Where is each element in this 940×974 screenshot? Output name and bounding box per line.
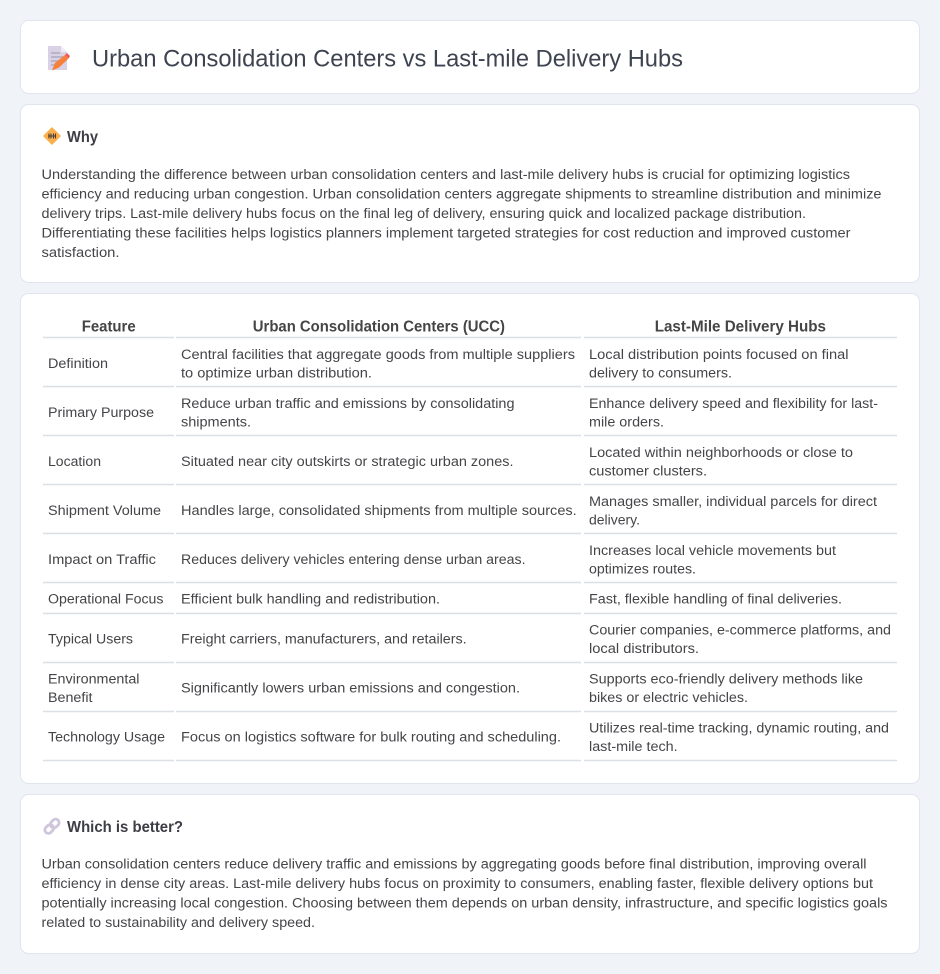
row: operational focus: Fast, flexible handling of final deliveries.: [589, 592, 842, 608]
row: primary purpose: Enhance delivery speed and flexibility for last-: [589, 396, 878, 412]
text block: why paragraph: Differentiating these facilities helps logistics planners implement targeted strategies for cost reduction and improved customer: [42, 226, 851, 242]
row: technology usage: [48, 720, 889, 755]
table header: Feature: [82, 318, 136, 336]
row: definition: Central facilities that aggregate goods from multiple suppliers: [181, 347, 575, 363]
row: typical users: Courier companies, e-commerce platforms, and: [589, 622, 891, 638]
row: shipment volume: Shipment Volume: [48, 503, 161, 519]
row: impact on traffic: [48, 543, 836, 578]
text block: why paragraph: [42, 167, 882, 261]
row: environmental benefit: Significantly lowers urban emissions and congestion.: [181, 680, 520, 696]
text block: which is better paragraph: [42, 856, 887, 931]
row: operational focus: [48, 592, 842, 608]
row: impact on traffic: Impact on Traffic: [48, 552, 156, 568]
table header: Last-Mile Delivery Hubs: [655, 318, 826, 336]
heading: why: Why: [67, 129, 98, 146]
row: operational focus: Efficient bulk handling and redistribution.: [181, 592, 440, 608]
row: shipment volume: [48, 494, 877, 528]
icon: document with pencil: [48, 46, 70, 70]
heading: which is better: Which is better?: [67, 819, 183, 836]
row: location: Situated near city outskirts or strategic urban zones.: [181, 454, 514, 470]
row: typical users: Typical Users: [48, 632, 133, 648]
row: primary purpose: Reduce urban traffic and emissions by consolidating: [181, 396, 514, 412]
icon: diamond sign: [44, 128, 60, 144]
row: typical users: Freight carriers, manufacturers, and retailers.: [181, 632, 467, 648]
text block: why paragraph: satisfaction.: [42, 245, 119, 261]
row: definition: Local distribution points focused on final: [589, 347, 848, 363]
title: Urban Consolidation Centers vs Last-mile Delivery Hubs: [92, 46, 683, 72]
text block: why paragraph: Understanding the difference between urban consolidation centers and last-mile delivery hubs is crucial for optimizing logistics: [42, 167, 850, 183]
panel: comparison table: [20, 294, 920, 784]
row: impact on traffic: Increases local vehicle movements but: [589, 543, 836, 559]
row: definition: delivery to consumers.: [589, 366, 732, 382]
text block: why paragraph: delivery trips. Last-mile delivery hubs focus on the final leg of delivery, ensuring quick and localized package distribution.: [42, 206, 806, 222]
row: primary purpose: mile orders.: [589, 414, 664, 430]
row: environmental benefit: bikes or electric vehicles.: [589, 690, 748, 706]
text block: which is better paragraph: efficiency in dense city areas. Last-mile delivery hubs focus on proximity to consumers, enabling faster, flexible delivery options but: [42, 876, 873, 892]
row: technology usage: Focus on logistics software for bulk routing and scheduling.: [181, 730, 561, 746]
row: primary purpose: [48, 396, 878, 430]
row: impact on traffic: Reduces delivery vehicles entering dense urban areas.: [181, 552, 526, 568]
row: location: Location: [48, 454, 101, 470]
row: operational focus: Operational Focus: [48, 592, 164, 608]
panel: which is better: [20, 794, 920, 954]
text block: why paragraph: efficiency and reducing urban congestion. Urban consolidation centers aggregate shipments to streamline distribution and minimize: [42, 186, 882, 202]
row: shipment volume: Manages smaller, individual parcels for direct: [589, 494, 877, 510]
row: location: customer clusters.: [589, 464, 707, 480]
row: typical users: local distributors.: [589, 641, 699, 657]
row: definition: Definition: [48, 356, 108, 372]
icon: chain link: [43, 818, 61, 835]
text block: which is better paragraph: potentially increasing local congestion. Choosing between them depends on urban density, infrastructure, and specific logistics goals: [42, 896, 887, 912]
row: technology usage: Utilizes real-time tracking, dynamic routing, and: [589, 720, 889, 736]
panel: title header: [20, 20, 920, 94]
table header: [82, 318, 826, 336]
row: primary purpose: shipments.: [181, 414, 251, 430]
row: location: [48, 445, 853, 480]
row: impact on traffic: optimizes routes.: [589, 562, 696, 578]
row: environmental benefit: Environmental: [48, 672, 140, 688]
row: typical users: [48, 622, 891, 657]
text block: which is better paragraph: related to sustainability and delivery speed.: [42, 915, 315, 931]
row: environmental benefit: [48, 672, 863, 706]
row: shipment volume: delivery.: [589, 512, 640, 528]
row: technology usage: last-mile tech.: [589, 739, 678, 755]
panel: why: [20, 104, 920, 282]
row: technology usage: Technology Usage: [48, 730, 165, 746]
row: definition: to optimize urban distribution.: [181, 366, 372, 382]
table header: Urban Consolidation Centers (UCC): [253, 318, 505, 336]
row: location: Located within neighborhoods or close to: [589, 445, 853, 461]
text block: which is better paragraph: Urban consolidation centers reduce delivery traffic and emissions by aggregating goods before final distribution, improving overall: [42, 856, 866, 872]
row: environmental benefit: Benefit: [48, 690, 93, 706]
row: shipment volume: Handles large, consolidated shipments from multiple sources.: [181, 503, 577, 519]
row: primary purpose: Primary Purpose: [48, 405, 154, 421]
row: definition: [48, 347, 848, 382]
row: environmental benefit: Supports eco-friendly delivery methods like: [589, 672, 863, 688]
